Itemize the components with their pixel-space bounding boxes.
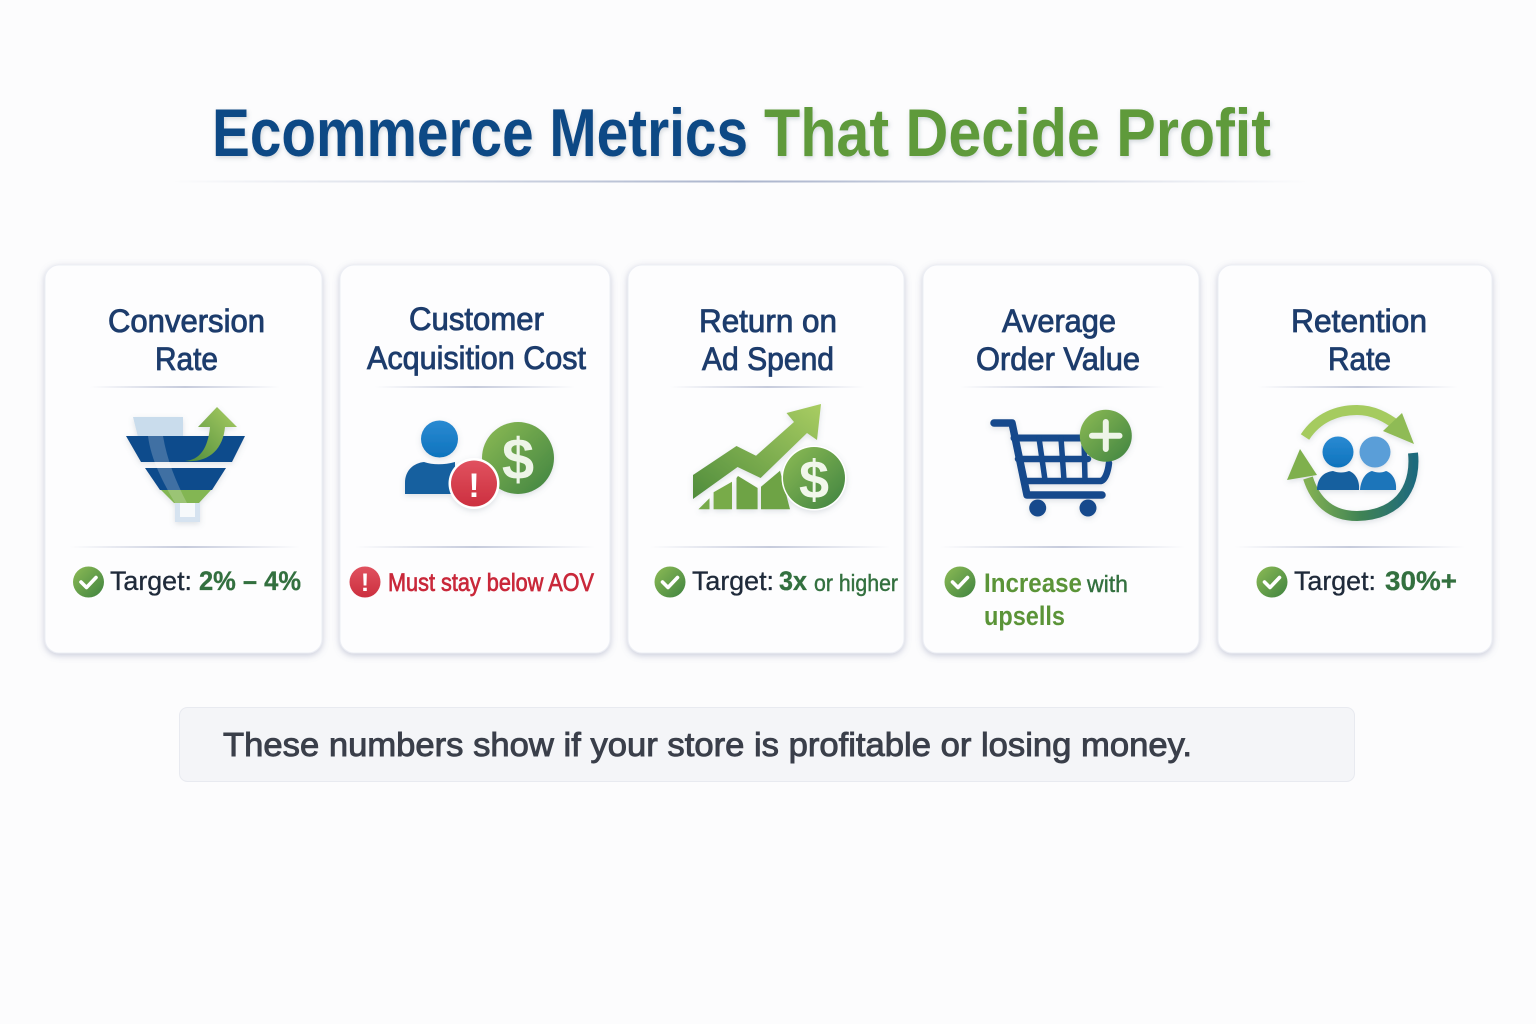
heading: return on ad spend <box>699 303 837 377</box>
panel: conversion rate <box>45 265 322 653</box>
target: 30%+: Target: <box>1294 566 1376 596</box>
target: 3x or higher: Target: <box>692 566 774 596</box>
target: 30%+ <box>1256 566 1457 598</box>
title: Ecommerce Metrics <box>212 95 748 171</box>
target: 3x or higher: 3x <box>779 566 807 596</box>
heading: customer acquisition cost <box>367 301 586 376</box>
tip: increase with upsells: upsells <box>984 601 1065 631</box>
warning: must stay below AOV: Must stay below AOV <box>388 569 594 597</box>
icon: customer, dollar and alert: ! <box>468 467 480 505</box>
heading: retention rate: Rate <box>1328 341 1391 377</box>
tip: increase with upsells <box>944 566 1128 631</box>
icon: shopping cart with plus <box>994 410 1132 516</box>
icon: retention cycle with customers <box>1287 410 1414 516</box>
tip: increase with upsells: Increase <box>984 568 1082 598</box>
icon: customer, dollar and alert: $ <box>502 427 534 492</box>
icon: growth chart with dollar <box>693 404 846 510</box>
panel: average order value <box>923 265 1199 653</box>
heading: average order value <box>976 303 1140 377</box>
heading: average order value: Order Value <box>976 341 1140 377</box>
heading: retention rate: Retention <box>1291 303 1427 339</box>
heading: retention rate <box>1291 303 1427 377</box>
heading: customer acquisition cost: Acquisition Cost <box>367 340 586 376</box>
heading: average order value: Average <box>1002 303 1116 339</box>
target: 2% - 4% <box>73 566 301 598</box>
heading: conversion rate: Rate <box>155 341 218 377</box>
heading: conversion rate <box>108 303 265 377</box>
target: 30%+: 30%+ <box>1385 566 1457 596</box>
heading: return on ad spend: Return on <box>699 303 837 339</box>
icon: funnel with arrow <box>126 407 245 522</box>
warning: must stay below AOV: ! <box>361 569 369 597</box>
target: 2% - 4%: 2% – 4% <box>199 566 301 596</box>
heading: conversion rate: Conversion <box>108 303 265 339</box>
title: That Decide Profit <box>764 95 1271 171</box>
target: 3x or higher <box>654 566 898 598</box>
callout: These numbers show if your store is profitable or losing money. <box>223 726 1192 763</box>
warning: must stay below AOV <box>350 566 594 598</box>
callout <box>180 708 1354 782</box>
tip: increase with upsells: with <box>1086 571 1128 597</box>
title <box>212 95 1271 171</box>
heading: return on ad spend: Ad Spend <box>702 341 834 377</box>
heading: customer acquisition cost: Customer <box>409 301 544 337</box>
target: 2% - 4%: Target: <box>110 566 192 596</box>
panel: customer acquisition cost <box>340 265 610 653</box>
target: 3x or higher: or higher <box>814 570 898 596</box>
icon: customer, dollar and alert <box>405 420 554 509</box>
icon: growth chart with dollar: $ <box>799 450 829 510</box>
panel: return on ad spend <box>628 265 904 653</box>
panel: retention rate <box>1218 265 1492 653</box>
